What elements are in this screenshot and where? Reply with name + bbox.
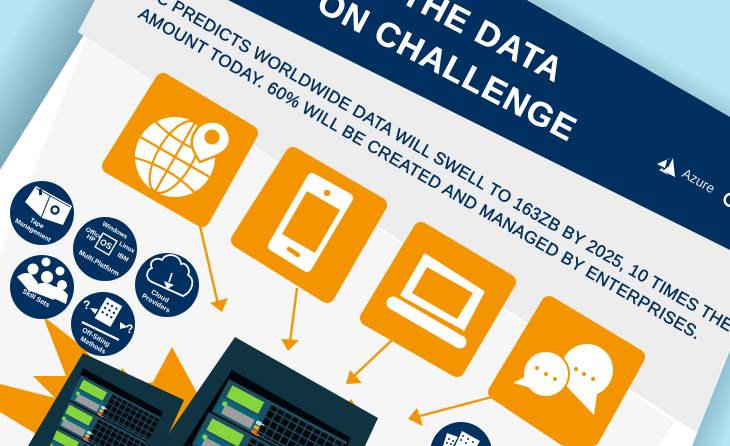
arrow: globe to server bbox=[200, 226, 228, 312]
circle: multi-platform bbox=[73, 217, 137, 281]
icon: phone square bbox=[239, 155, 379, 295]
circle: multi-platform: HP bbox=[85, 233, 97, 244]
panel: header band bbox=[228, 0, 730, 250]
circle: multi-platform: Windows bbox=[101, 221, 129, 241]
circle: multi-platform: Linux bbox=[118, 240, 136, 255]
rack: right server bbox=[160, 337, 378, 446]
circle: skill sets: Skill Sets bbox=[21, 288, 51, 309]
burst behind servers bbox=[0, 316, 200, 446]
circle: bottom buildings bbox=[431, 422, 491, 446]
icon: laptop square bbox=[368, 230, 508, 369]
circle: off-siting methods: Off-Siting bbox=[81, 327, 111, 348]
circle: skill sets bbox=[10, 255, 74, 319]
circle: off-siting methods bbox=[71, 292, 135, 356]
logo: Azure bbox=[657, 157, 730, 206]
circle: tape management bbox=[10, 181, 74, 245]
intro text: AMOUNT TODAY. 60% WILL BE CREATED AND MANAGED BY ENTERPRISES. bbox=[135, 4, 704, 343]
circle: off-siting methods: ? bbox=[126, 322, 133, 336]
circle: multi-platform: Multi.Platform bbox=[77, 249, 120, 278]
icon: chat square bbox=[496, 304, 637, 438]
circle: multi-platform: Office bbox=[84, 226, 104, 241]
circle: off-siting methods: Methods bbox=[79, 336, 107, 356]
circle: cloud providers: Providers bbox=[140, 293, 171, 315]
icon: globe square bbox=[110, 81, 250, 219]
circle: off-siting methods: ? bbox=[83, 298, 90, 312]
circle: multi-platform: IBM bbox=[116, 252, 130, 264]
burst tip bbox=[346, 399, 355, 405]
arrow: laptop to server bbox=[346, 340, 392, 384]
circle: tape management: Management bbox=[14, 218, 53, 244]
circle: cloud providers bbox=[135, 253, 199, 317]
circle: tape management: Tape bbox=[29, 217, 45, 231]
arrow: phone to server bbox=[281, 288, 299, 351]
arrow: chat to circle bbox=[408, 397, 492, 426]
circle: cloud providers: Cloud bbox=[150, 289, 170, 305]
circle: multi-platform: OS bbox=[98, 237, 114, 252]
logo: Azure: Azure bbox=[680, 166, 718, 196]
rack: left server bbox=[26, 353, 184, 446]
